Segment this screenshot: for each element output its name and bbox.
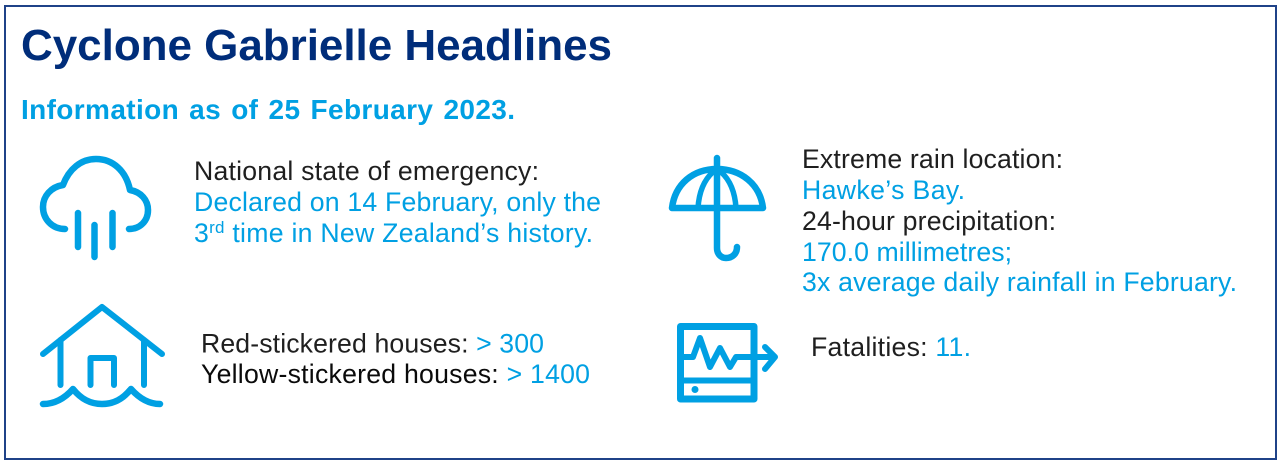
text block: stickered houses [201,328,590,389]
icon: umbrella [672,158,763,258]
text block: national state of emergency: National state of emergency: [194,156,539,186]
title: Cyclone Gabrielle Headlines [21,21,612,70]
text block: stickered houses: Red-stickered houses: > 300 [201,328,544,358]
text block: extreme rain: 3x average daily rainfall in February. [802,267,1237,297]
icon: flooded house [43,307,162,404]
subtitle: Information as of 25 February 2023. [21,94,515,125]
text block: extreme rain [802,144,1237,297]
text block: national state of emergency: time in New Zealand’s history. [225,218,593,248]
text block: national state of emergency [194,156,601,248]
text block: extreme rain: 24-hour precipitation: [802,206,1056,236]
text block: national state of emergency: rd [209,218,224,237]
icon: monitor with pulse arrow [680,326,775,399]
text block: national state of emergency: 3 [194,218,209,248]
icon: rain cloud [43,159,148,257]
text block: extreme rain: Extreme rain location: [802,144,1063,174]
text block: extreme rain: 170.0 millimetres; [802,237,1012,267]
text block: fatalities: Fatalities: 11. [811,332,971,362]
text block: stickered houses: Yellow-stickered houses: > 1400 [201,359,590,389]
text block: national state of emergency: Declared on 14 February, only the [194,187,601,217]
text block: extreme rain: Hawke’s Bay. [802,175,965,205]
